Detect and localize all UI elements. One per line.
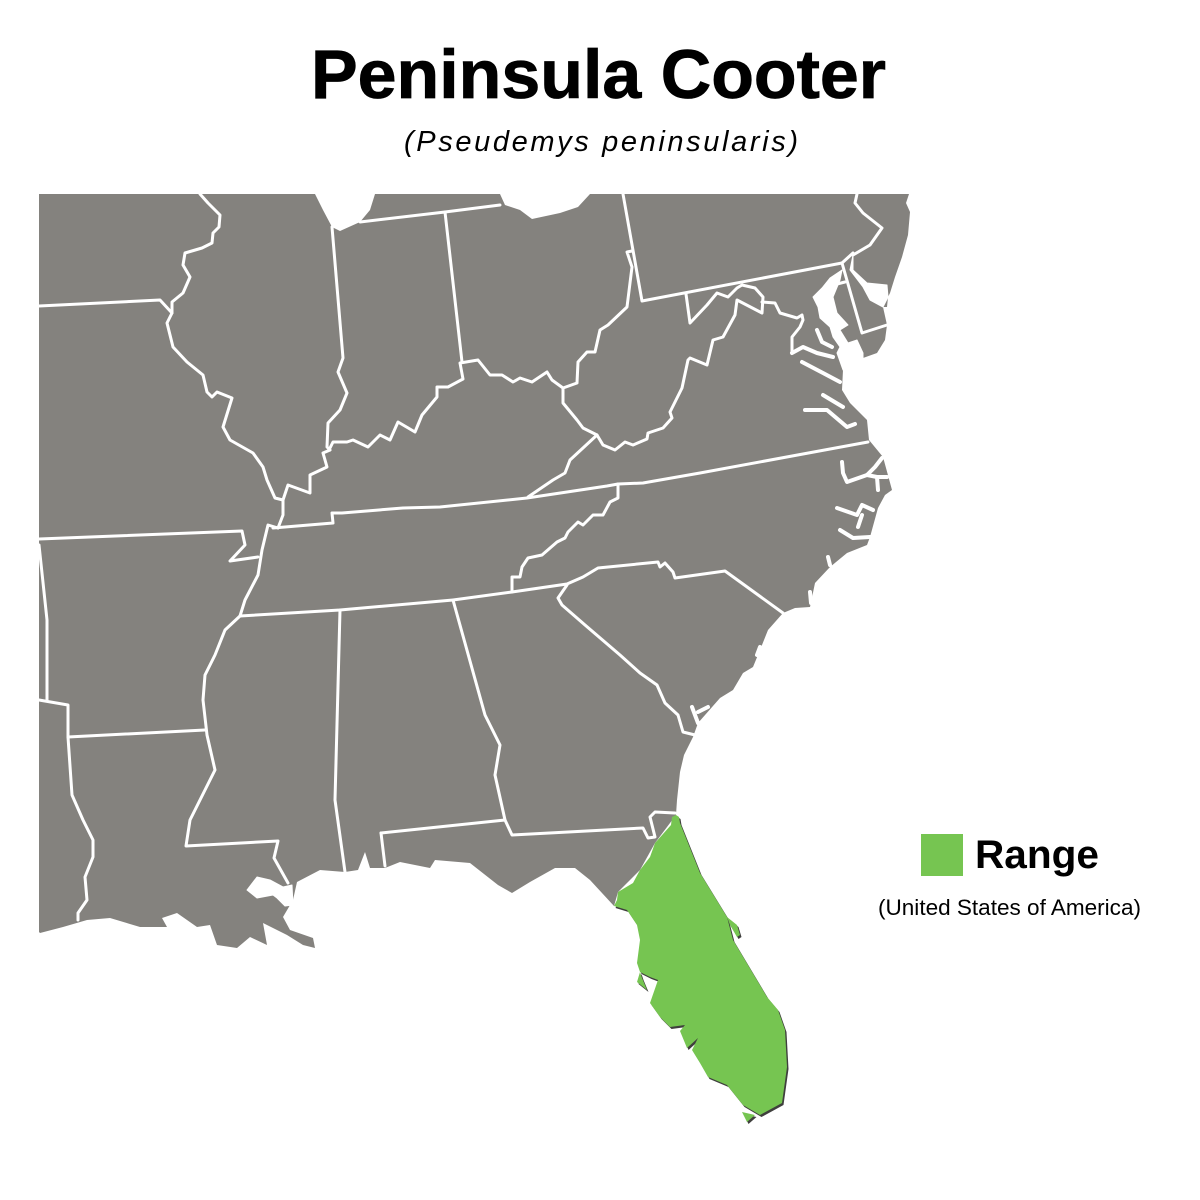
map: southeastern United States [39, 194, 910, 948]
subtitle: scientific name: (Pseudemys peninsularis) [404, 126, 798, 158]
title: Peninsula Cooter [311, 36, 886, 113]
water bodies [247, 255, 888, 906]
legend [878, 833, 1141, 920]
legend swatch [921, 834, 963, 876]
legend label: Range [975, 833, 1099, 877]
florida range area [614, 815, 788, 1124]
legend note: (United States of America) [878, 895, 1141, 920]
range shadow [616, 817, 788, 1124]
range fill [614, 815, 787, 1122]
state borders [39, 194, 887, 920]
land mass [39, 194, 910, 948]
